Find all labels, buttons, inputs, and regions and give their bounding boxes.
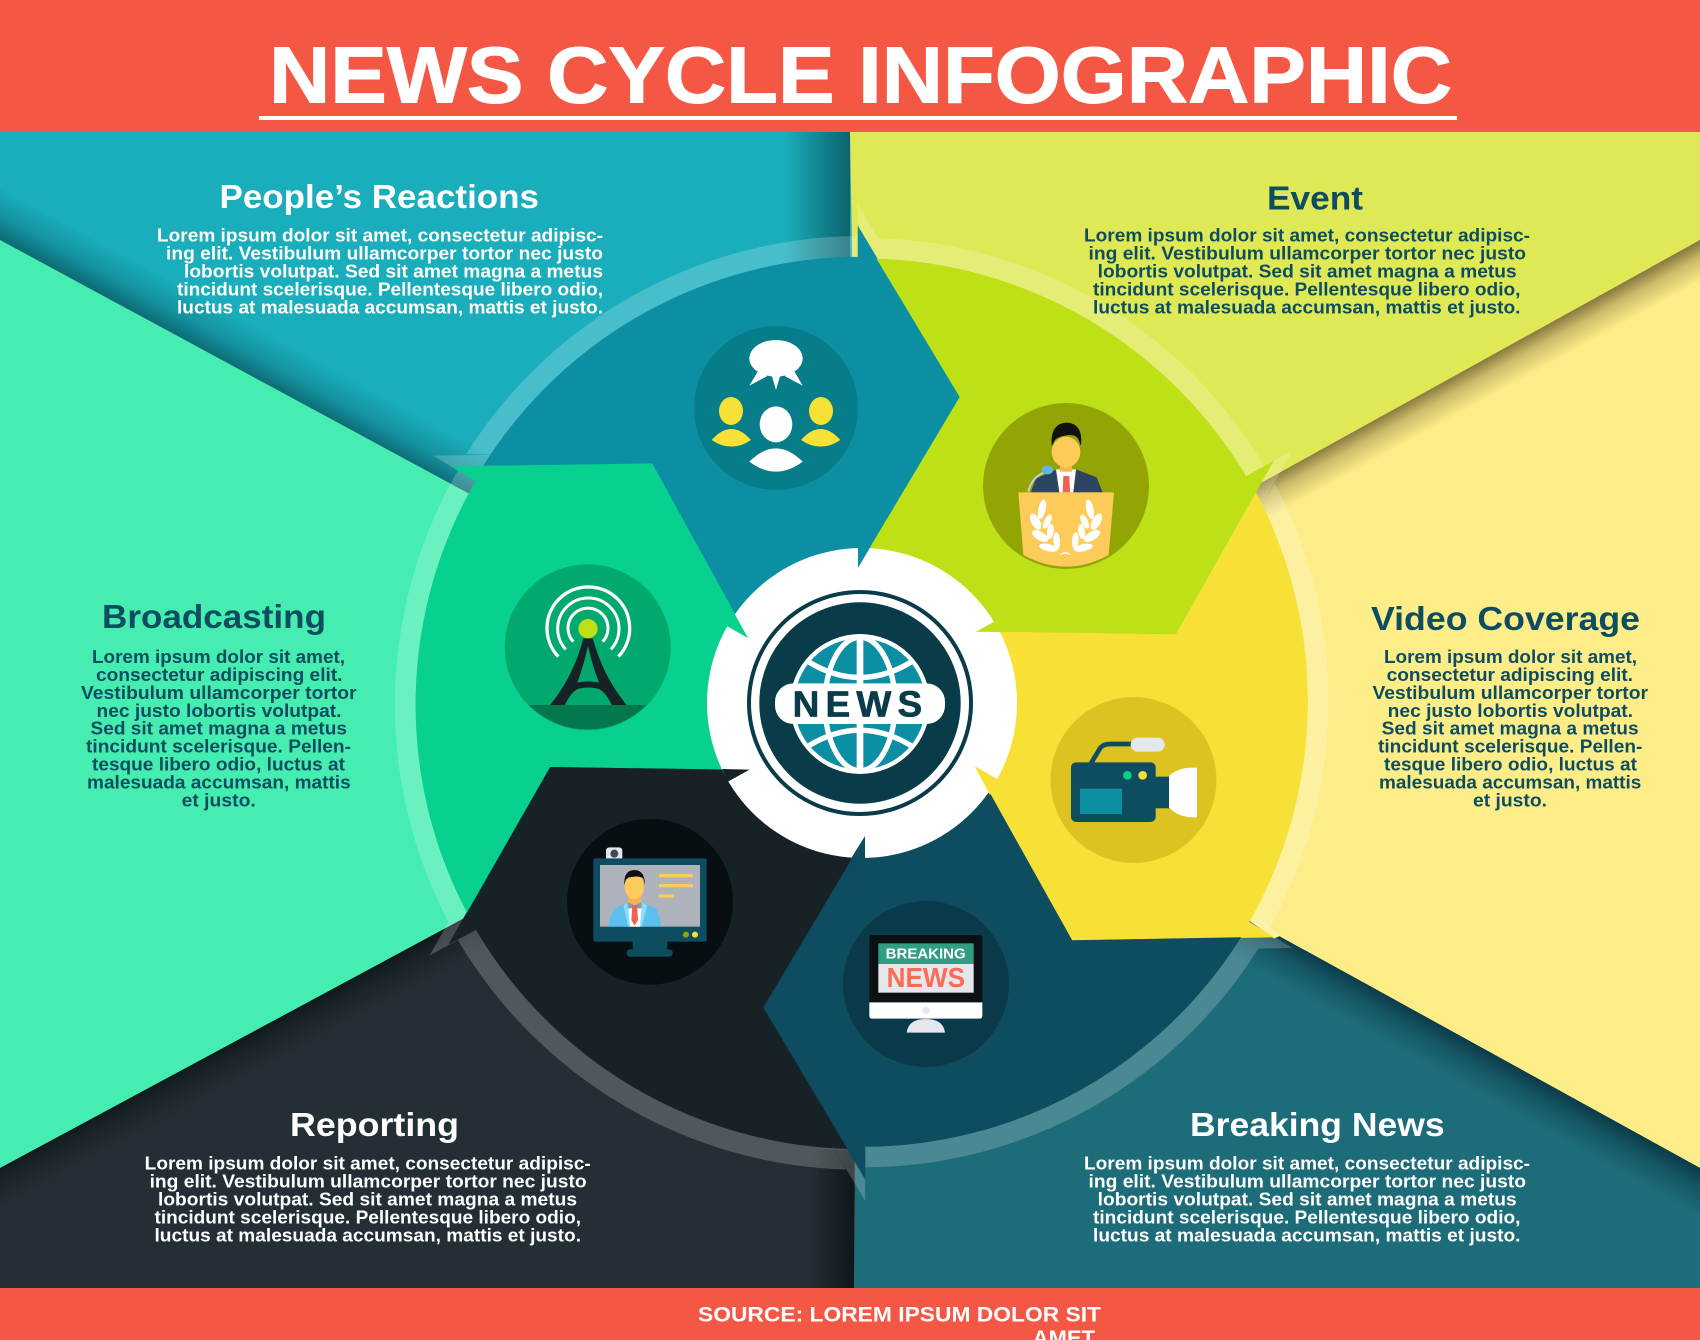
body: Event: luctus at malesuada accumsan, mattis et justo. xyxy=(1093,298,1520,318)
body: Video Coverage: Vestibulum ullamcorper tortor xyxy=(1372,683,1648,703)
body: People's Reactions: lobortis volutpat. Sed sit amet magna a metus xyxy=(184,262,603,282)
icon: speaker at podium xyxy=(983,403,1149,569)
arrow: Video Coverage xyxy=(862,493,1308,940)
heading: Broadcasting: Broadcasting xyxy=(102,598,326,635)
arrow: Breaking News xyxy=(763,703,1240,1178)
body: Broadcasting xyxy=(81,647,357,810)
body: People's Reactions: Lorem ipsum dolor sit amet, consectetur adipisc- xyxy=(157,226,603,246)
body: Reporting: tincidunt scelerisque. Pellentesque libero odio, xyxy=(154,1208,581,1228)
body: Breaking News: luctus at malesuada accumsan, mattis et justo. xyxy=(1093,1226,1520,1246)
outer pale ring xyxy=(395,204,1328,1201)
body: Breaking News xyxy=(1084,1154,1530,1246)
icon: broadcast tower xyxy=(505,564,671,730)
body: Video Coverage: Lorem ipsum dolor sit amet, xyxy=(1384,647,1637,667)
body: Breaking News: lobortis volutpat. Sed sit amet magna a metus xyxy=(1098,1190,1517,1210)
arrow: Reporting xyxy=(449,703,865,1149)
central news emblem xyxy=(707,546,1017,860)
body: Video Coverage: tincidunt scelerisque. Pellen- xyxy=(1378,736,1642,756)
body: Video Coverage: consectetur adipiscing elit. xyxy=(1387,665,1633,685)
title: NEWS CYCLE INFOGRAPHIC xyxy=(269,30,1452,120)
text block: Video Coverage xyxy=(1371,600,1648,810)
text block: Reporting xyxy=(145,1106,591,1246)
heading: Video Coverage: Video Coverage xyxy=(1371,600,1640,637)
icon: news anchor on screen xyxy=(567,819,733,985)
body: Video Coverage xyxy=(1372,647,1648,810)
body: Broadcasting: Lorem ipsum dolor sit amet, xyxy=(92,647,345,667)
icon: people reacting xyxy=(694,326,858,490)
text block: People's Reactions xyxy=(157,178,603,318)
icon: breaking news monitor: BREAKING xyxy=(886,946,966,962)
source note: SOURCE: LOREM IPSUM DOLOR SIT xyxy=(698,1304,1101,1326)
header band xyxy=(0,0,1700,132)
source note xyxy=(698,1304,1101,1340)
body: Broadcasting: et justo. xyxy=(182,790,256,810)
body: Reporting: luctus at malesuada accumsan, mattis et justo. xyxy=(154,1226,581,1246)
body: People's Reactions: luctus at malesuada accumsan, mattis et justo. xyxy=(177,298,603,318)
panel background: Reporting xyxy=(0,705,860,1288)
arrow: Broadcasting xyxy=(416,464,862,912)
body: People's Reactions xyxy=(157,226,603,318)
arrow: Event xyxy=(858,259,1273,703)
panel background: Breaking News xyxy=(854,705,1700,1288)
icon: video camera xyxy=(1050,697,1216,863)
panel background: People's Reactions xyxy=(0,132,860,705)
arrow: People's Reactions xyxy=(484,226,960,703)
heading: Reporting: Reporting xyxy=(290,1106,459,1143)
body: Broadcasting: malesuada accumsan, mattis xyxy=(87,772,351,792)
text block: Breaking News xyxy=(1084,1106,1530,1246)
body: Video Coverage: tesque libero odio, luctus at xyxy=(1384,754,1637,774)
body: Event: tincidunt scelerisque. Pellentesque libero odio, xyxy=(1093,280,1520,300)
body: Video Coverage: nec justo lobortis volutpat. xyxy=(1388,701,1633,721)
body: Event: lobortis volutpat. Sed sit amet magna a metus xyxy=(1098,262,1517,282)
body: People's Reactions: ing elit. Vestibulum ullamcorper tortor nec justo xyxy=(166,244,603,264)
body: Video Coverage: et justo. xyxy=(1473,790,1547,810)
body: People's Reactions: tincidunt scelerisque. Pellentesque libero odio, xyxy=(177,280,603,300)
body: Breaking News: tincidunt scelerisque. Pellentesque libero odio, xyxy=(1093,1208,1520,1228)
body: Event xyxy=(1084,226,1530,318)
heading: Breaking News: Breaking News xyxy=(1190,1106,1445,1143)
panel background: Video Coverage xyxy=(860,240,1700,1168)
panel background: Broadcasting xyxy=(0,240,860,1168)
body: Breaking News: Lorem ipsum dolor sit amet, consectetur adipisc- xyxy=(1084,1154,1530,1174)
icon: breaking news monitor: NEWS xyxy=(887,962,965,993)
body: Breaking News: ing elit. Vestibulum ullamcorper tortor nec justo xyxy=(1088,1172,1526,1192)
body: Event: Lorem ipsum dolor sit amet, consectetur adipisc- xyxy=(1084,226,1530,246)
body: Reporting xyxy=(145,1154,591,1246)
footer band xyxy=(0,1288,1700,1340)
body: Reporting: Lorem ipsum dolor sit amet, consectetur adipisc- xyxy=(145,1154,591,1174)
body: Video Coverage: Sed sit amet magna a metus xyxy=(1382,719,1639,739)
body: Reporting: ing elit. Vestibulum ullamcorper tortor nec justo xyxy=(150,1172,587,1192)
body: Broadcasting: tesque libero odio, luctus at xyxy=(92,754,345,774)
body: Broadcasting: tincidunt scelerisque. Pellen- xyxy=(86,736,351,756)
icon: breaking news monitor xyxy=(843,901,1009,1067)
body: Reporting: lobortis volutpat. Sed sit amet magna a metus xyxy=(158,1190,577,1210)
body: Video Coverage: malesuada accumsan, mattis xyxy=(1379,772,1641,792)
panel background: Event xyxy=(850,132,1700,705)
body: Broadcasting: Sed sit amet magna a metus xyxy=(90,719,347,739)
heading: Event: Event xyxy=(1267,180,1363,216)
heading: People's Reactions: People’s Reactions xyxy=(220,178,539,215)
body: Event: ing elit. Vestibulum ullamcorper tortor nec justo xyxy=(1088,244,1526,264)
body: Broadcasting: Vestibulum ullamcorper tortor xyxy=(81,683,357,703)
text block: Broadcasting xyxy=(81,598,357,810)
body: Broadcasting: consectetur adipiscing elit. xyxy=(96,665,342,685)
text block: Event xyxy=(1084,180,1530,318)
central news emblem: NEWS xyxy=(793,684,928,725)
body: Broadcasting: nec justo lobortis volutpat. xyxy=(96,701,342,721)
